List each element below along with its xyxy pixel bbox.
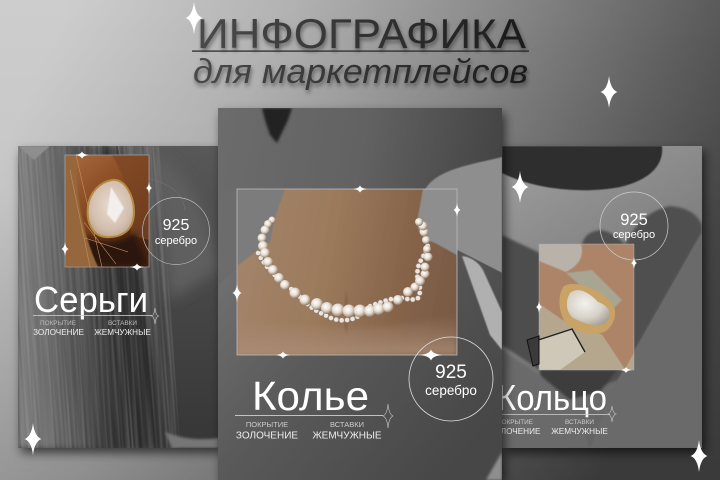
lower box <box>539 304 625 370</box>
diamond icon <box>608 406 616 422</box>
earrings photo background <box>18 146 218 448</box>
price circle: 925 silver: серебро <box>155 235 197 247</box>
necklace inset photo <box>237 189 457 355</box>
panel: ring <box>490 146 702 448</box>
subtitle: для маркетплейсов <box>193 53 528 91</box>
divider with diamond <box>33 308 158 324</box>
divider <box>502 414 610 415</box>
title heading: ИНФОГРАФИКА <box>197 10 526 57</box>
product name: Серьги <box>34 279 148 320</box>
price circle: 925 silver: серебро <box>613 229 655 241</box>
price circle: 925 silver <box>142 198 210 264</box>
spec labels: ЗОЛОЧЕНИЕ <box>490 427 541 436</box>
earring inset photo <box>65 155 149 267</box>
sparkle: title <box>186 2 202 34</box>
specs: ПОКРЫТИЕ <box>40 320 76 327</box>
sparkle: ring panel <box>512 171 528 203</box>
sparkle: bottom right <box>690 440 708 472</box>
specs: ЗОЛОЧЕНИЕ <box>236 430 298 442</box>
ring inset photo <box>532 244 634 370</box>
sparkle: bottom left <box>24 423 42 455</box>
necklace large pearls <box>258 216 432 318</box>
panel shadow <box>18 146 219 448</box>
specs: ПОКРЫТИЕ <box>246 420 288 429</box>
box behind finger <box>566 270 622 312</box>
panel: earrings <box>14 144 218 460</box>
product name: Кольцо <box>497 377 607 418</box>
price circle: 925 silver: 925 <box>163 217 189 234</box>
necklace sparkles <box>232 186 460 360</box>
ring gold band <box>559 284 615 334</box>
panel: necklace <box>218 108 502 480</box>
specs: ВСТАВКИ <box>330 420 364 429</box>
specs: ЖЕМЧУЖНЫЕ <box>312 430 382 442</box>
spec labels: ЖЕМЧУЖНЫЕ <box>551 427 608 436</box>
price circle: 925 silver: серебро <box>425 383 477 398</box>
necklace small pearl strand <box>258 245 428 320</box>
ring box outside inset <box>527 336 539 366</box>
panel shadow <box>502 146 702 448</box>
panel shadow <box>218 108 502 480</box>
title block <box>192 10 529 91</box>
product name and specs <box>502 385 610 434</box>
spec labels <box>502 420 608 434</box>
necklace photo background <box>218 108 502 480</box>
ring pearl <box>567 290 610 325</box>
price circle: 925 silver <box>409 337 493 421</box>
product name: Колье <box>252 373 369 419</box>
price circle: 925 silver: 925 <box>620 211 648 229</box>
spec labels: ВСТАВКИ <box>565 419 594 426</box>
earring pearl <box>88 180 134 237</box>
specs: ВСТАВКИ <box>108 320 137 327</box>
finger <box>539 244 634 370</box>
sparkle: top right <box>600 76 618 108</box>
specs: ЗОЛОЧЕНИЕ <box>33 328 84 337</box>
price circle: 925 silver <box>600 192 668 260</box>
earring sparkles <box>62 152 152 270</box>
corner beige <box>626 355 634 370</box>
spec labels: ПОКРЫТИЕ <box>497 419 533 426</box>
ring sparkles <box>536 257 637 373</box>
specs: ЖЕМЧУЖНЫЕ <box>94 328 151 337</box>
white label box <box>539 328 585 370</box>
earring inset frame <box>65 155 149 267</box>
divider with diamond <box>235 404 393 428</box>
ring inset frame <box>539 244 634 370</box>
ring photo background <box>502 146 702 448</box>
specs <box>33 320 151 337</box>
necklace inset frame <box>237 189 457 355</box>
specs <box>236 420 382 442</box>
title divider <box>192 50 529 52</box>
price circle: 925 silver: 925 <box>435 362 467 383</box>
